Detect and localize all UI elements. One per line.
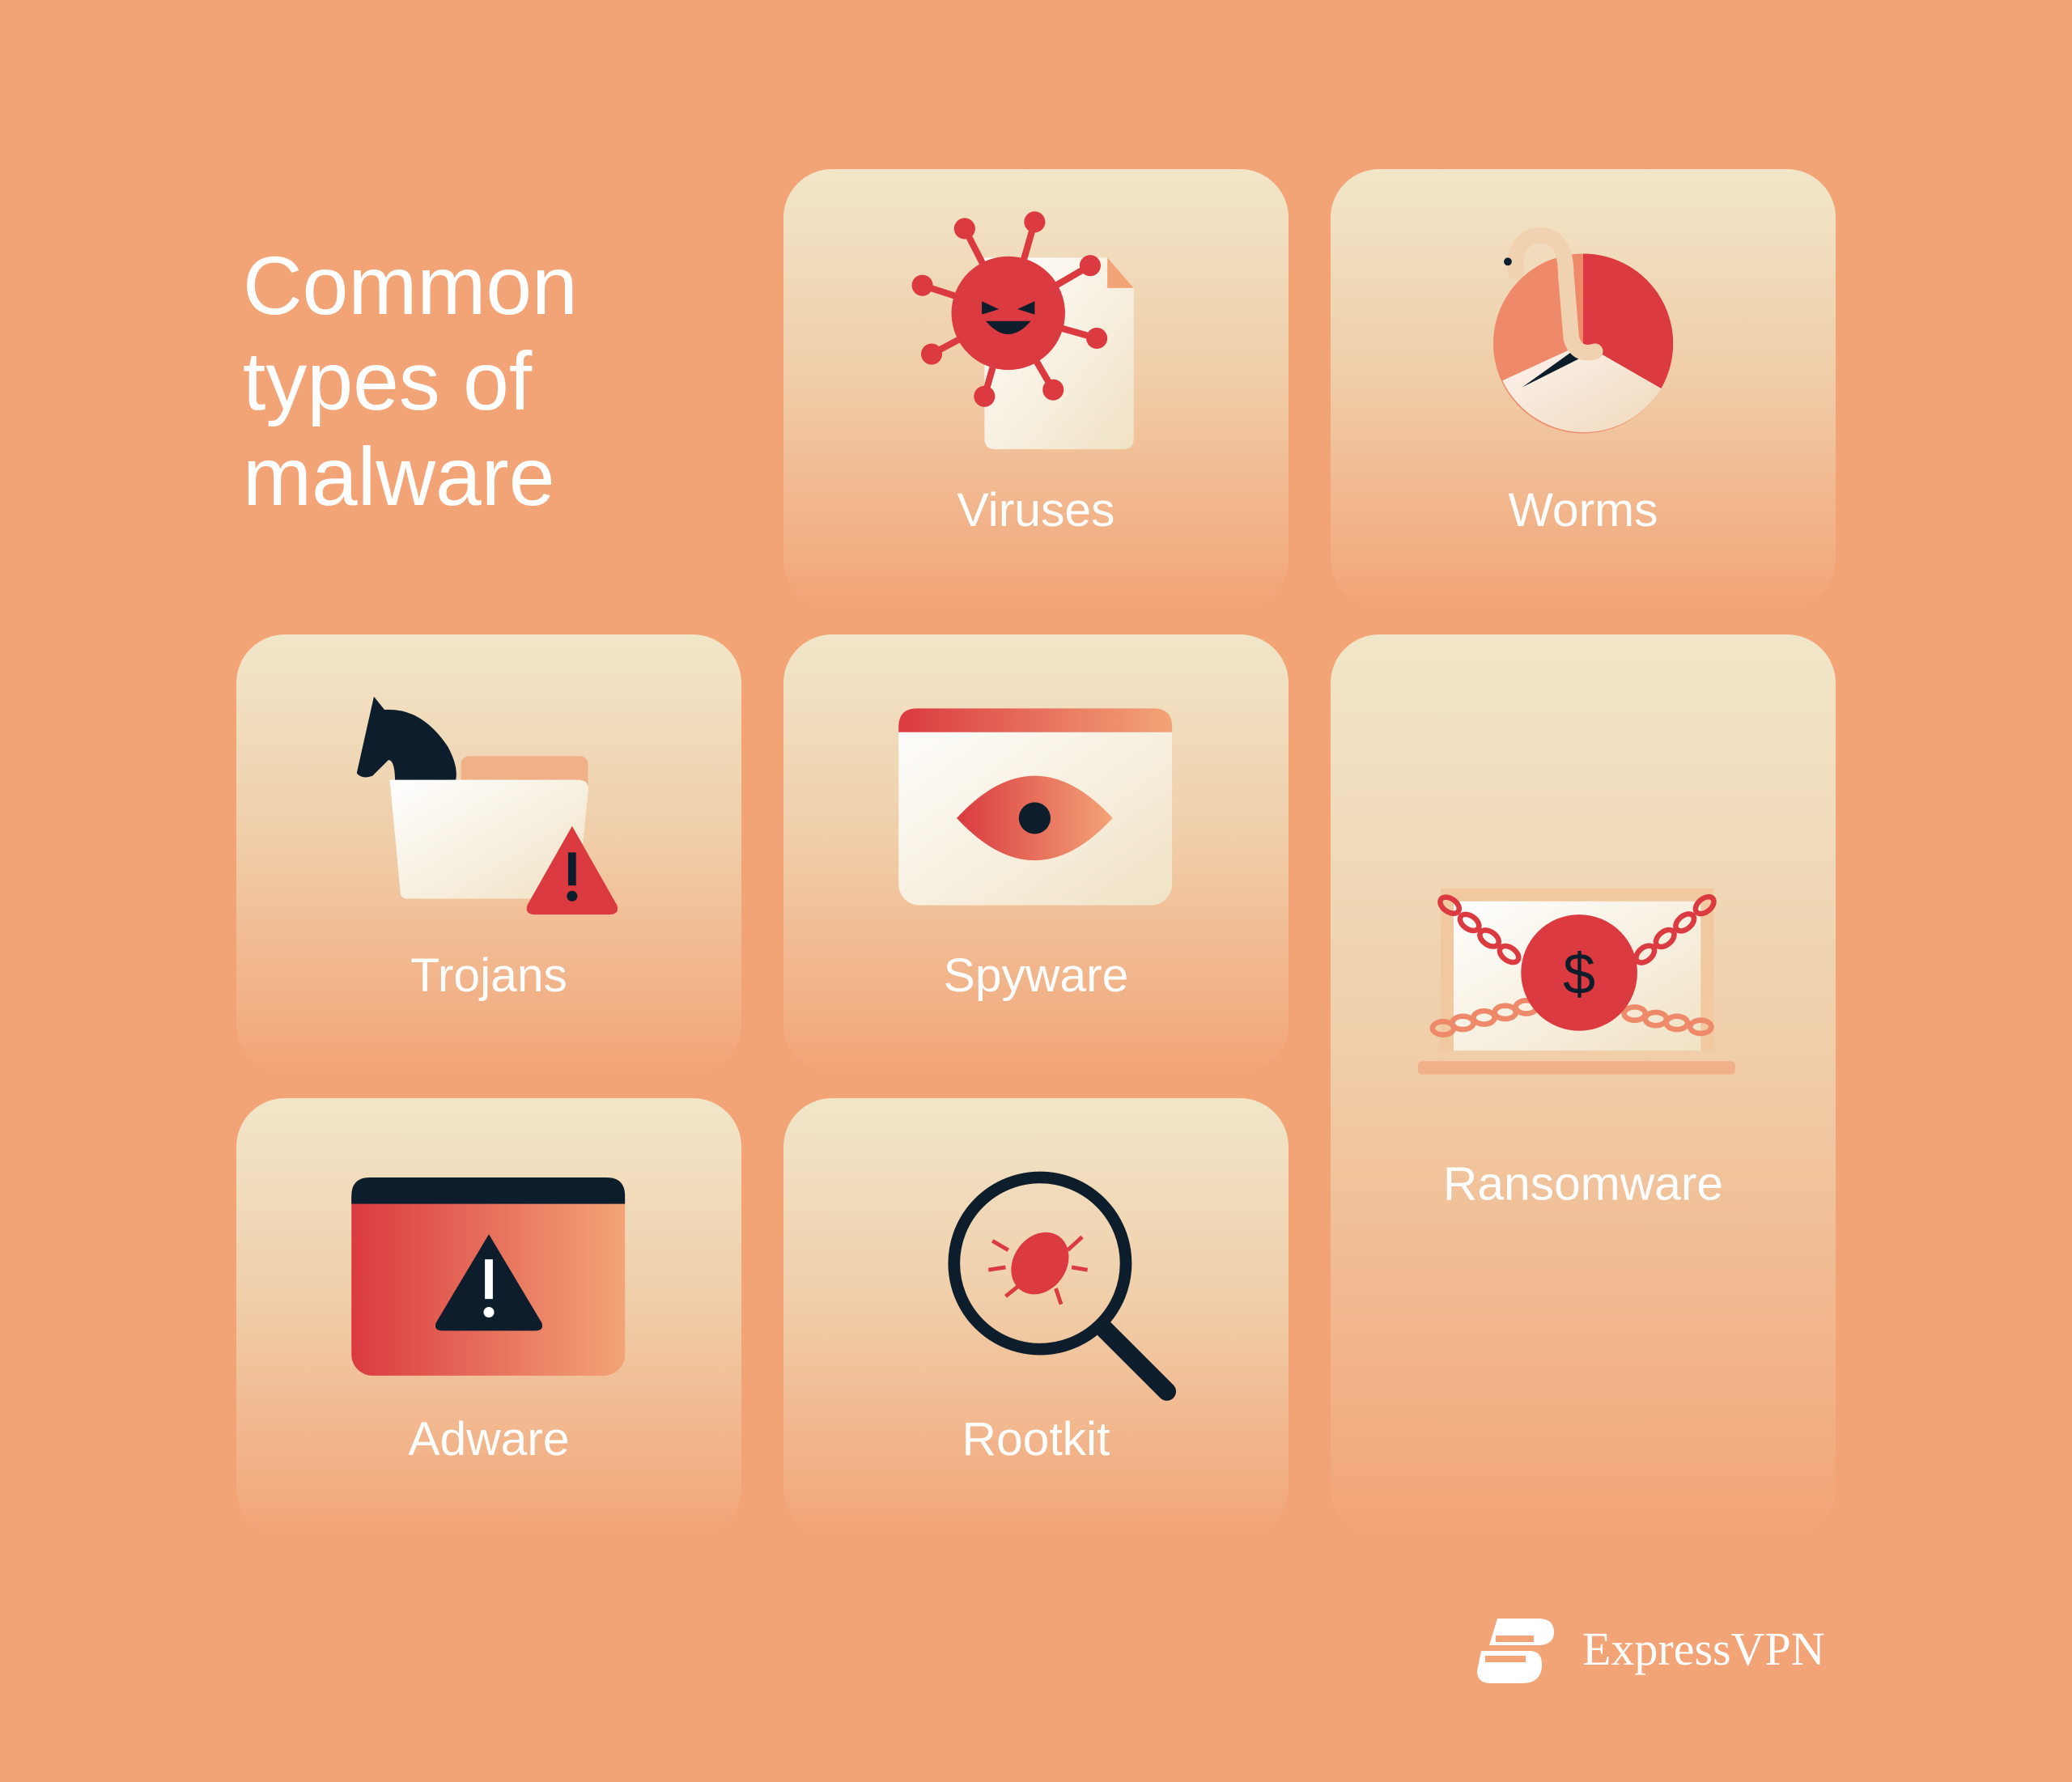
panel: trojans: Trojans — [410, 949, 567, 1002]
icon: chained laptop: $ — [1563, 942, 1595, 1007]
icon: worm clock — [1493, 235, 1673, 434]
icon: spy eye window — [898, 708, 1172, 906]
panel: worms: Worms — [1509, 484, 1658, 537]
logo: ExpressVPN: ExpressVPN — [1582, 1623, 1825, 1675]
title: Common — [243, 240, 578, 332]
title: malware — [243, 431, 554, 523]
title — [243, 240, 578, 523]
panel: trojans — [236, 634, 741, 1073]
panel: rootkit — [783, 1098, 1289, 1537]
panel: worms — [1331, 169, 1836, 608]
logo: ExpressVPN — [1477, 1619, 1825, 1683]
panel: adware: Adware — [408, 1413, 570, 1466]
panel: spyware — [783, 634, 1289, 1073]
icon: chained laptop — [1418, 888, 1735, 1075]
icon: magnifier with bug — [954, 1177, 1167, 1391]
panel: ransomware — [1331, 634, 1836, 1537]
panel: viruses — [783, 169, 1289, 608]
title: types of — [243, 335, 532, 427]
panel: rootkit: Rootkit — [962, 1413, 1110, 1466]
icon: virus on document — [912, 211, 1134, 449]
icon: adware warning window — [351, 1177, 625, 1376]
panel: spyware: Spyware — [944, 949, 1128, 1002]
label: Viruses — [957, 484, 1115, 537]
panel: adware — [236, 1098, 741, 1537]
icon: trojan folder — [357, 697, 618, 914]
panel: ransomware: Ransomware — [1443, 1158, 1723, 1211]
